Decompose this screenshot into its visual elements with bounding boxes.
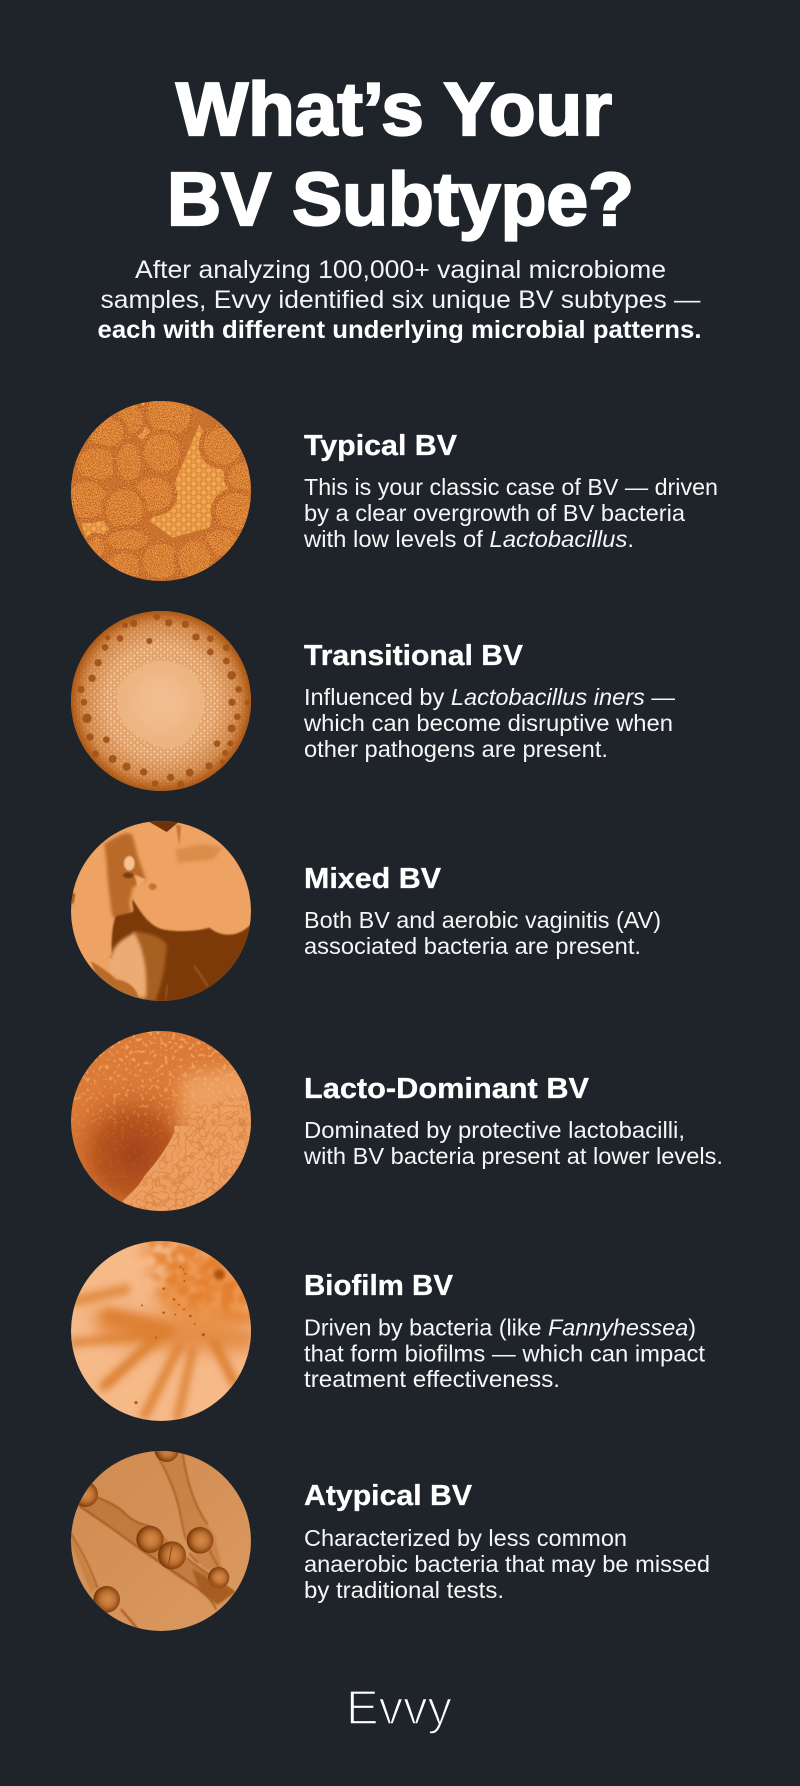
logo: Evvy: Evvy (346, 1682, 452, 1735)
description: anaerobic bacteria that may be missed (304, 1551, 710, 1577)
image: biofilm BV micrograph (71, 1241, 251, 1421)
image: transitional BV micrograph (71, 611, 251, 791)
image: mixed BV micrograph (71, 821, 251, 1001)
intro text (98, 256, 702, 344)
panel: lacto-dominant BV (66, 1026, 723, 1216)
description: by traditional tests. (304, 1577, 504, 1603)
intro text: each with different underlying microbial patterns. (98, 316, 702, 344)
heading: Atypical BV (304, 1480, 473, 1512)
description: that form biofilms — which can impact (304, 1340, 706, 1366)
image: typical BV micrograph (71, 401, 251, 581)
image: lacto-dominant BV micrograph (71, 1031, 251, 1211)
description (303, 1117, 723, 1169)
description: treatment effectiveness. (304, 1366, 560, 1392)
description (304, 1314, 706, 1392)
description: with low levels of Lactobacillus. (303, 526, 634, 552)
description: other pathogens are present. (304, 736, 608, 762)
heading: Typical BV (304, 430, 458, 462)
panel: mixed BV (66, 816, 661, 1006)
description (303, 684, 675, 762)
description: Influenced by Lactobacillus iners — (304, 684, 675, 710)
image: atypical BV micrograph (71, 1451, 251, 1631)
panel: atypical BV (71, 1451, 708, 1631)
description: Dominated by protective lactobacilli, (304, 1117, 685, 1143)
intro text: samples, Evvy identified six unique BV subtypes — (100, 286, 700, 314)
description: with BV bacteria present at lower levels. (303, 1143, 723, 1169)
description (304, 907, 661, 959)
description: Driven by bacteria (like Fannyhessea) (304, 1314, 696, 1340)
heading: Mixed BV (304, 863, 442, 895)
heading: Biofilm BV (304, 1270, 454, 1302)
description: which can become disruptive when (303, 710, 673, 736)
description (303, 474, 718, 552)
panel: transitional BV (66, 606, 675, 796)
title: BV Subtype? (167, 157, 634, 241)
description (304, 1525, 710, 1603)
description: Characterized by less common (304, 1525, 627, 1551)
panel: typical BV (66, 389, 718, 586)
description: by a clear overgrowth of BV bacteria (304, 500, 685, 526)
heading: Lacto-Dominant BV (304, 1073, 590, 1105)
title (167, 67, 634, 241)
intro text: After analyzing 100,000+ vaginal microbiome (135, 256, 666, 284)
description: Both BV and aerobic vaginitis (AV) (304, 907, 661, 933)
description: This is your classic case of BV — driven (304, 474, 718, 500)
title: What’s Your (176, 67, 612, 151)
heading: Transitional BV (304, 640, 524, 672)
description: associated bacteria are present. (304, 933, 641, 959)
panel: biofilm BV (66, 1236, 706, 1426)
